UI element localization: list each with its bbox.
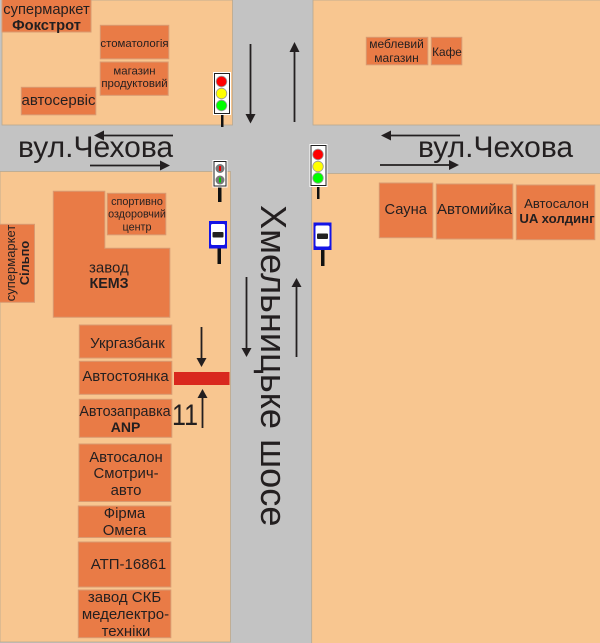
box: Автостоянка: Автостоянка [82,369,169,385]
traffic light top [213,72,231,127]
box: меблевий магазин: магазин [374,51,419,65]
box: меблевий магазин [366,37,428,65]
street label left: вул.Чехова [18,131,173,164]
arrow up road lower [292,278,302,357]
box: спортивно оздоровчий центр: спортивно [111,196,163,208]
box: супермаркет Сільпо: Сільпо [17,241,32,285]
street label right: вул.Чехова [418,131,573,164]
box: АТП-16861: АТП-16861 [91,556,166,573]
bus stop left [209,221,227,264]
box: Автосалон Смотрич-авто [79,444,171,502]
box: завод СКБ меделектро-техніки [78,589,171,640]
arrow down to barrier [196,327,206,367]
box: Автосалон Смотрич-авто: Смотрич- [93,466,159,482]
traffic light right [310,144,328,199]
box: меблевий магазин: меблевий [369,37,424,51]
box: Автомийка [436,184,513,239]
box: завод КЕМЗ: завод [89,260,129,276]
red barrier [174,372,230,385]
box: Фірма Омега [78,506,171,539]
box: Автосалон Смотрич-авто: Автосалон [89,450,163,466]
arrow left road left upper [94,130,173,140]
box: Автосалон UA холдинг [516,185,595,240]
box: завод КЕМЗ: КЕМЗ [90,276,129,292]
arrow right road right lower [380,160,459,170]
box: завод СКБ меделектро-техніки: техніки [102,623,150,640]
block: top right [313,0,600,125]
box: Фокстрот: Фокстрот [12,18,81,34]
box: Сауна [379,183,433,238]
box: Автосалон UA холдинг: UA холдинг [519,211,595,226]
arrows [90,42,460,428]
box: завод СКБ меделектро-техніки: завод СКБ [88,589,161,606]
box: Укргазбанк [79,325,172,358]
box: Фокстрот [2,0,91,34]
box: Автозаправка ANP [79,399,172,437]
box: Автомийка: Автомийка [437,201,513,218]
box: Кафе: Кафе [432,45,462,59]
box: Фірма Омега: Фірма [104,506,146,522]
box: спортивно оздоровчий центр [107,193,166,235]
box: завод СКБ меделектро-техніки: меделектро- [82,606,169,623]
box: автосервіс [21,87,96,115]
box: стоматологія: стоматологія [100,38,169,50]
box: Автосалон Смотрич-авто: авто [111,483,141,499]
box: АТП-16861 [78,542,171,587]
arrow left road right upper [381,130,460,140]
box: автосервіс: автосервіс [21,92,96,109]
road label: Хмельницьке шосе [253,205,294,526]
box: Фірма Омега: Омега [103,523,147,539]
arrow right road left lower [90,160,170,170]
box: Автостоянка [79,361,172,394]
box: магазин продуктовий: магазин [113,66,156,78]
bus stop right [314,222,332,266]
box: спортивно оздоровчий центр: оздоровчий [108,208,166,220]
box: Автосалон UA холдинг: Автосалон [524,196,589,211]
box: спортивно оздоровчий центр: центр [123,222,151,234]
traffic light pedestrian [212,160,228,202]
box: завод КЕМЗ [53,191,170,317]
number 11: 11 [172,399,198,432]
box: Автозаправка ANP: Автозаправка [79,404,171,420]
box: магазин продуктовий: продуктовий [101,78,168,90]
box: стоматологія [100,25,169,59]
arrow down top [246,44,256,124]
box: Автозаправка ANP: ANP [111,419,140,435]
box: супермаркет Сільпо: супермаркет [3,225,18,301]
arrow down road lower [242,277,252,357]
box: Фокстрот: супермаркет [3,2,90,18]
box: супермаркет Сільпо [0,224,34,302]
box: Укргазбанк: Укргазбанк [90,336,165,352]
box: Сауна: Сауна [384,202,428,218]
block: bottom right [312,174,600,643]
box: Кафе [431,37,462,65]
block: top left [2,0,232,125]
arrow up to barrier [198,389,208,428]
block: bottom left [0,172,230,642]
arrow up top [290,42,300,122]
box: магазин продуктовий [100,62,168,95]
